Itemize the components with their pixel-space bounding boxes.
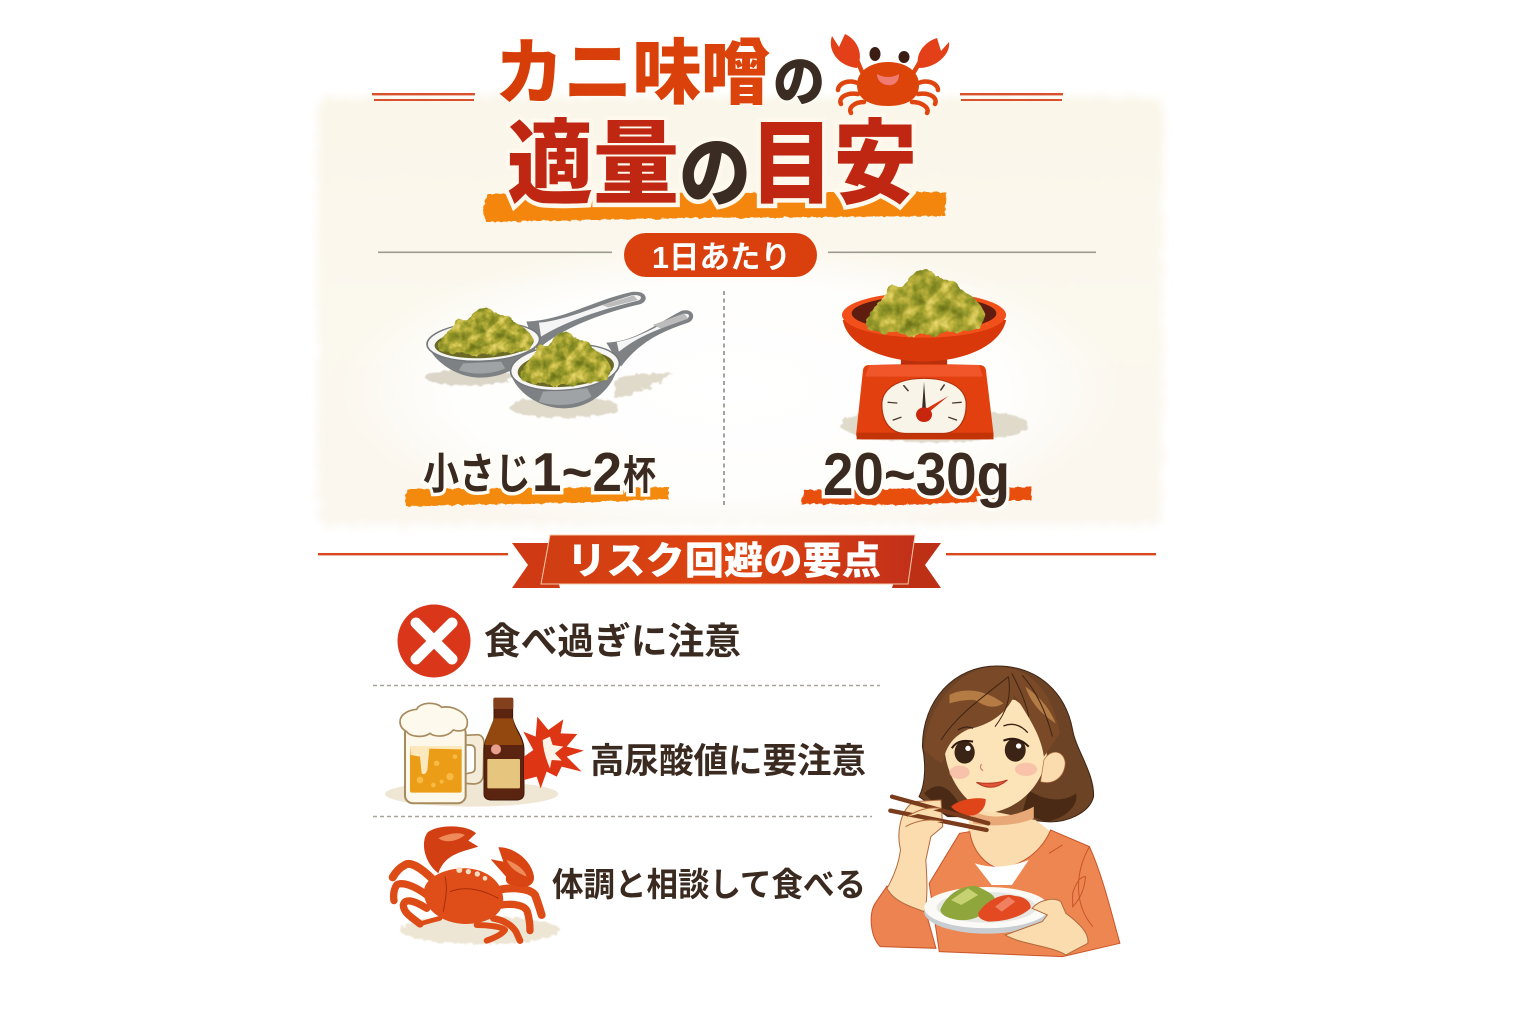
divider: first row — [373, 684, 880, 686]
divider: second row — [373, 816, 872, 818]
heading brush stroke — [483, 192, 946, 222]
title: 目安 — [750, 114, 917, 216]
text: avoid overeating: 食べ過ぎに注意 — [484, 621, 741, 662]
eyes — [952, 724, 1029, 764]
label: spoon amount: 杯 — [623, 454, 656, 498]
pill: per day — [624, 233, 817, 277]
hair: back — [919, 666, 1094, 822]
banner: risk avoidance points — [512, 535, 941, 588]
pill: per day: 1日あたり — [652, 240, 791, 275]
label: spoon amount: 小さじ — [423, 451, 531, 499]
holding hand — [1005, 899, 1088, 955]
title decoration: left double rule — [372, 93, 475, 101]
text: watch uric acid: 高尿酸値に要注意 — [590, 742, 866, 781]
mouth — [976, 780, 1007, 787]
title: の — [773, 51, 825, 113]
title: カニ味噌 — [495, 34, 770, 114]
label: spoon amount — [423, 441, 656, 503]
text: eat according to condition: 体調と相談して食べる — [552, 866, 866, 903]
illustration: woman eating crab miso — [871, 666, 1120, 957]
panel: paper background — [317, 97, 1163, 540]
sleeve — [871, 886, 936, 948]
title decoration: right double rule — [960, 93, 1063, 101]
icon: smiling crab — [831, 34, 949, 113]
title: 適量 — [507, 114, 679, 216]
cardigan — [929, 830, 1120, 957]
label brush: left — [405, 487, 669, 506]
title — [495, 34, 917, 217]
banner: risk avoidance points: リスク回避の要点 — [567, 541, 881, 583]
neck — [968, 807, 1051, 868]
section rule: left — [378, 252, 612, 253]
chopsticks and crab morsel — [890, 797, 988, 830]
face — [944, 699, 1047, 813]
section rule: right — [828, 252, 1096, 253]
icon: red cross mark — [398, 604, 470, 678]
arm and hand — [887, 800, 943, 912]
label brush: right — [801, 487, 1032, 505]
banner rule: right — [946, 553, 1156, 555]
icon: beer and bottle with burst — [385, 698, 584, 807]
icon: kitchen scale with crab miso — [840, 268, 1029, 442]
label: spoon amount: 1~2 — [532, 441, 622, 503]
title: の — [679, 129, 751, 217]
banner rule: left — [318, 553, 508, 555]
divider: vertical dashed — [723, 291, 725, 505]
plate with food — [924, 886, 1049, 934]
icon: red crab — [393, 826, 560, 944]
ear — [1041, 752, 1065, 782]
inner shirt — [975, 860, 1029, 885]
blush — [949, 763, 1037, 779]
hair: bangs — [924, 667, 1060, 763]
icon: two spoons of crab miso — [425, 292, 693, 418]
label: gram amount: 20~30g — [823, 441, 1010, 508]
